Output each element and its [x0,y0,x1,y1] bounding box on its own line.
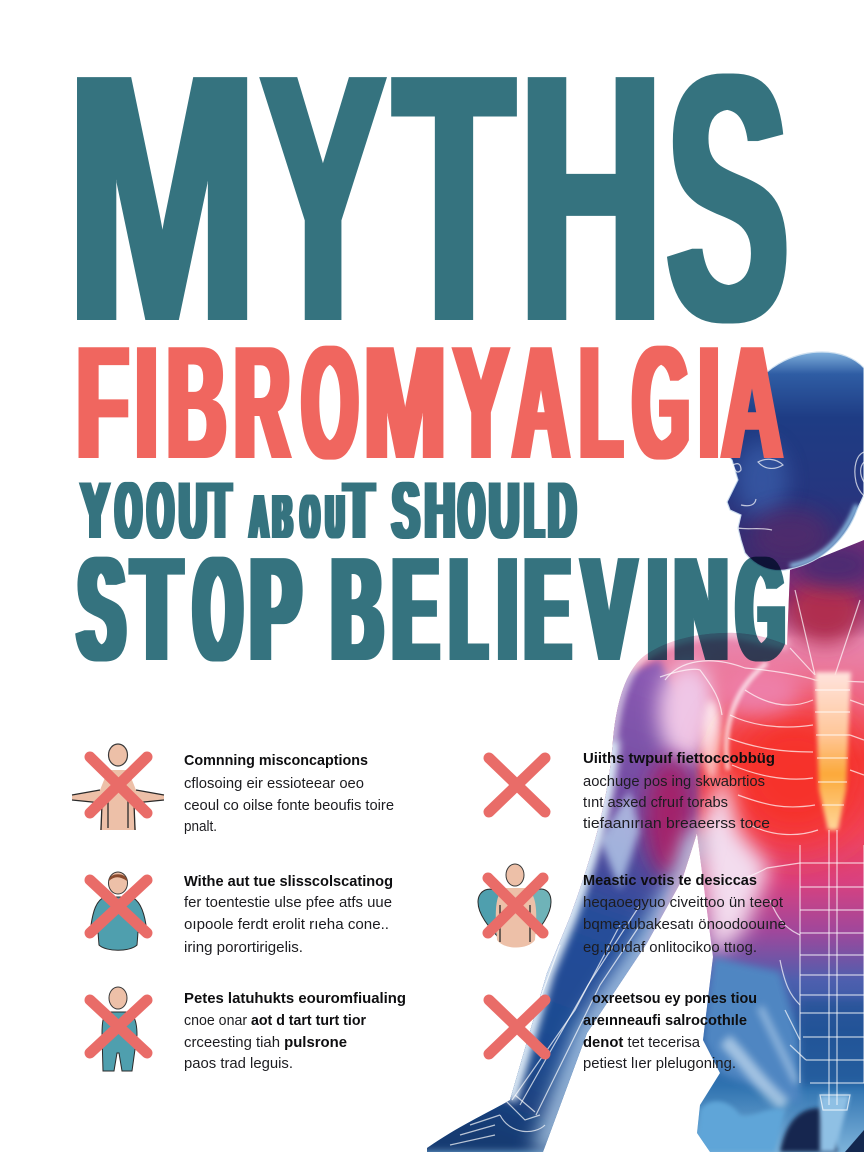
myth 1 text: cflosoing eir essioteear oeo [184,775,364,792]
myth 1 text [184,752,394,835]
body with arm and torso [400,540,864,1152]
heading: YOOUT ABOUT SHOULD: Y [81,466,109,556]
myth 4 text [583,750,775,832]
myth 2 text: iring porortirigelis. [184,939,303,956]
heading: YOOUT ABOUT SHOULD: T [344,466,374,556]
myth 3 text: crceesting tiah pulsrone [184,1034,347,1051]
title: MYTHS: Y [261,0,385,395]
heading: STOP BELIEVING: T [132,527,181,692]
myth 1 text: Comnning misconcaptions [184,752,368,769]
title: MYTHS: M [67,0,258,395]
heading: STOP BELIEVING: I [649,527,666,692]
icon: red cross [489,1000,545,1054]
subtitle: FIBROMYALGIA: I [699,313,719,493]
myth 5 text: Meastic votis te desiccas [583,872,757,889]
myth 3 text [184,990,406,1072]
myth 6 text [583,990,757,1072]
heading: STOP BELIEVING: B [332,527,382,692]
myth 1 text: pnalt. [184,818,217,835]
myth 3 text: Petes latuhukts eouromfiualing [184,990,406,1007]
subtitle: FIBROMYALGIA: L [580,313,622,493]
icon: person with arms out, crossed out [72,744,164,830]
title: MYTHS: H [520,0,662,395]
icon: red cross [489,758,545,812]
subtitle: FIBROMYALGIA: I [136,313,157,493]
illustration: human body anatomy figure [400,352,864,1152]
heading: STOP BELIEVING: S [78,527,124,692]
heading: STOP BELIEVING: I [499,527,516,692]
myth 6 text: denot tet tecerisa [583,1034,701,1051]
subtitle: FIBROMYALGIA: O [302,313,358,493]
panel: myth item 5 [478,864,786,956]
heading: YOOUT ABOUT SHOULD: O [148,466,173,556]
myth 5 text: eg.poıdaf onlitocikoo ttıog. [583,939,757,956]
myth 2 text: Withe aut tue slisscolscatinog [184,873,393,890]
rib and muscle lines [726,663,767,770]
heading: YOOUT ABOUT SHOULD: S [392,466,419,556]
icon: standing person, crossed out [90,987,147,1071]
subtitle: FIBROMYALGIA: A [513,313,569,493]
heading: YOOUT ABOUT SHOULD: A [250,483,268,552]
outer rim light [510,740,613,1100]
myth 6 text: oxreetsou ey pones tiou [592,990,757,1007]
icon: person with teal wings, crossed out [478,864,551,948]
myth 1 text: ceoul co oilse fonte beoufis toire [184,797,394,814]
heading: YOOUT ABOUT SHOULD: U [489,466,519,556]
myth 4 text: tiefaanırıan breaeerss toce [583,815,770,832]
myth 6 text: areınneaufi salrocothıle [583,1012,747,1029]
heading: STOP BELIEVING: E [393,527,438,692]
panel: myth item 6 [489,990,757,1072]
heading: STOP BELIEVING: N [675,527,728,692]
panel: myth item 4 [489,750,775,832]
subtitle: FIBROMYALGIA: B [167,313,226,493]
panel: myth item 3 [90,987,406,1072]
spine [815,672,851,830]
text: D [548,466,576,556]
myth 4 text: aochuge pos ing skwabrtios [583,773,765,790]
heading: YOOUT ABOUT SHOULD: H [425,466,455,556]
heading: YOOUT ABOUT SHOULD: O [459,466,484,556]
panel: myth item 1 [72,744,394,835]
head [723,352,864,571]
myth 2 text [184,873,393,956]
myth 2 text: oıpoole ferdt erolit rıeha cone.. [184,916,389,933]
abdominal grid [767,845,864,1083]
text: G [737,527,784,692]
subtitle: FIBROMYALGIA: A [722,313,782,493]
myth 2 text: fer toentestie ulse pfee atfs uue [184,894,392,911]
title: MYTHS: T [394,0,514,395]
myth 4 text: Uiiths twpuıf fiettoccobbüg [583,750,775,767]
subtitle: FIBROMYALGIA: F [77,313,128,493]
heading: STOP BELIEVING: E [525,527,570,692]
subtitle: FIBROMYALGIA: M [364,313,446,493]
myth 3 text: cnoe onar aot d tart turt tior [184,1012,366,1029]
myth 5 text [583,872,786,956]
myth 4 text: tınt asxed cfruıf torabs [583,794,728,811]
icon: person in teal shirt, crossed out [90,872,147,950]
myth 5 text: heqaoegyuo civeittoo ün teeot [583,894,784,911]
heading: YOOUT ABOUT SHOULD: O [301,483,319,552]
facial features [733,459,783,530]
myth 3 text: paos trad leguis. [184,1055,293,1072]
arm bones [450,905,640,1145]
heading: STOP BELIEVING: O [194,527,241,692]
heading: YOOUT ABOUT SHOULD: B [273,483,292,552]
subtitle: FIBROMYALGIA: G [633,313,689,493]
arm colour [400,660,700,1152]
heading: STOP BELIEVING: P [250,527,300,692]
heading: YOOUT ABOUT SHOULD: O [116,466,141,556]
subtitle: FIBROMYALGIA: R [234,313,290,493]
heading: STOP BELIEVING: V [583,527,635,692]
myth 6 text: petiest lıer plelugoning. [583,1055,736,1072]
myth 5 text: bqmeaubakesatı önoodoouıne [583,916,786,933]
heading: YOOUT ABOUT SHOULD: U [326,483,344,552]
ear [855,452,864,496]
subtitle: FIBROMYALGIA: Y [454,313,508,493]
heading: YOOUT ABOUT SHOULD: U [179,466,207,556]
heading: YOOUT ABOUT SHOULD: L [525,466,544,556]
panel: myth item 2 [90,872,393,956]
heading: YOOUT ABOUT SHOULD: T [209,466,231,556]
heading: STOP BELIEVING: L [451,527,486,692]
